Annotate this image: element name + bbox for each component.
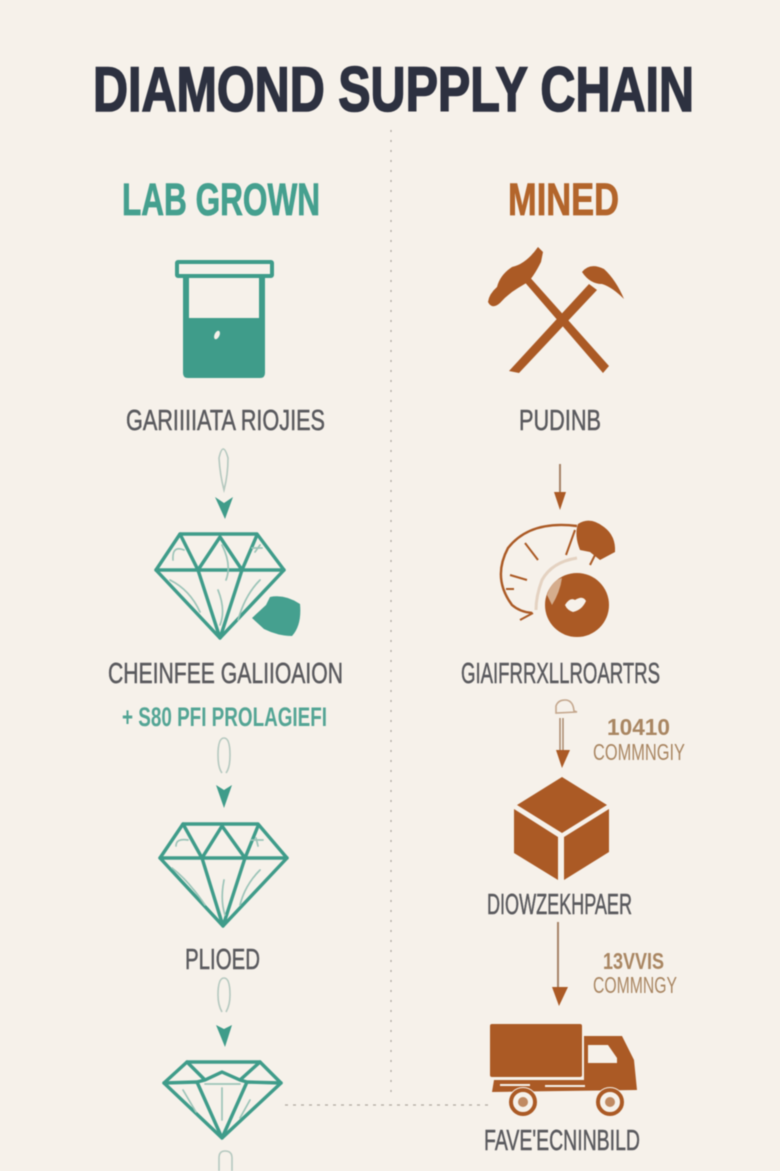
arrow: step two to three (216, 738, 232, 808)
heading: mined: MINED (508, 174, 619, 225)
label: step three: DIOWZEKHPAER (487, 889, 632, 921)
label: step two: CHEINFEE GALIIOAION (108, 658, 343, 690)
icon: rough ore (501, 521, 615, 637)
icon: polished diamond (160, 824, 287, 926)
label: step one: GARIIIIATA RIOJIES (126, 405, 325, 437)
heading: lab grown: LAB GROWN (122, 174, 320, 225)
label: step one: PUDINB (519, 405, 601, 437)
note: stat two (593, 948, 677, 998)
icon: cut diamond (164, 1062, 281, 1138)
icon: delivery truck (490, 1024, 637, 1117)
icon: crossed hammer and pick (488, 247, 624, 373)
note: stat two: COMMNGY (593, 972, 677, 998)
note: stat one (593, 714, 685, 765)
arrow: step one to two (554, 464, 566, 510)
icon: small helmet (556, 700, 577, 713)
icon: rough diamond (156, 534, 300, 638)
arrow: step two to three (556, 718, 570, 768)
column: mined (461, 174, 685, 1157)
note: stat one: COMMNGIY (593, 739, 685, 765)
arrow: step three to four (216, 978, 232, 1047)
icon: reactor beaker (177, 262, 272, 378)
arrow: step three to four (552, 922, 568, 1006)
note: stat one: 10410 (607, 714, 670, 740)
note: process detail: + S80 PFI PROLAGIEFI (122, 702, 327, 732)
arrow: step one to two (215, 449, 233, 519)
note: stat two: 13VVIS (603, 948, 664, 974)
arrow: continuing stub (219, 1151, 232, 1171)
label: step two: GIAIFRRXLLROARTRS (461, 658, 660, 690)
label: step three: PLIOED (185, 944, 260, 976)
icon: crate cube (514, 777, 609, 880)
column: lab grown (108, 174, 343, 1171)
connector: dashed link between columns (285, 1104, 490, 1106)
label: step four: FAVE'ECNINBILD (484, 1125, 640, 1157)
